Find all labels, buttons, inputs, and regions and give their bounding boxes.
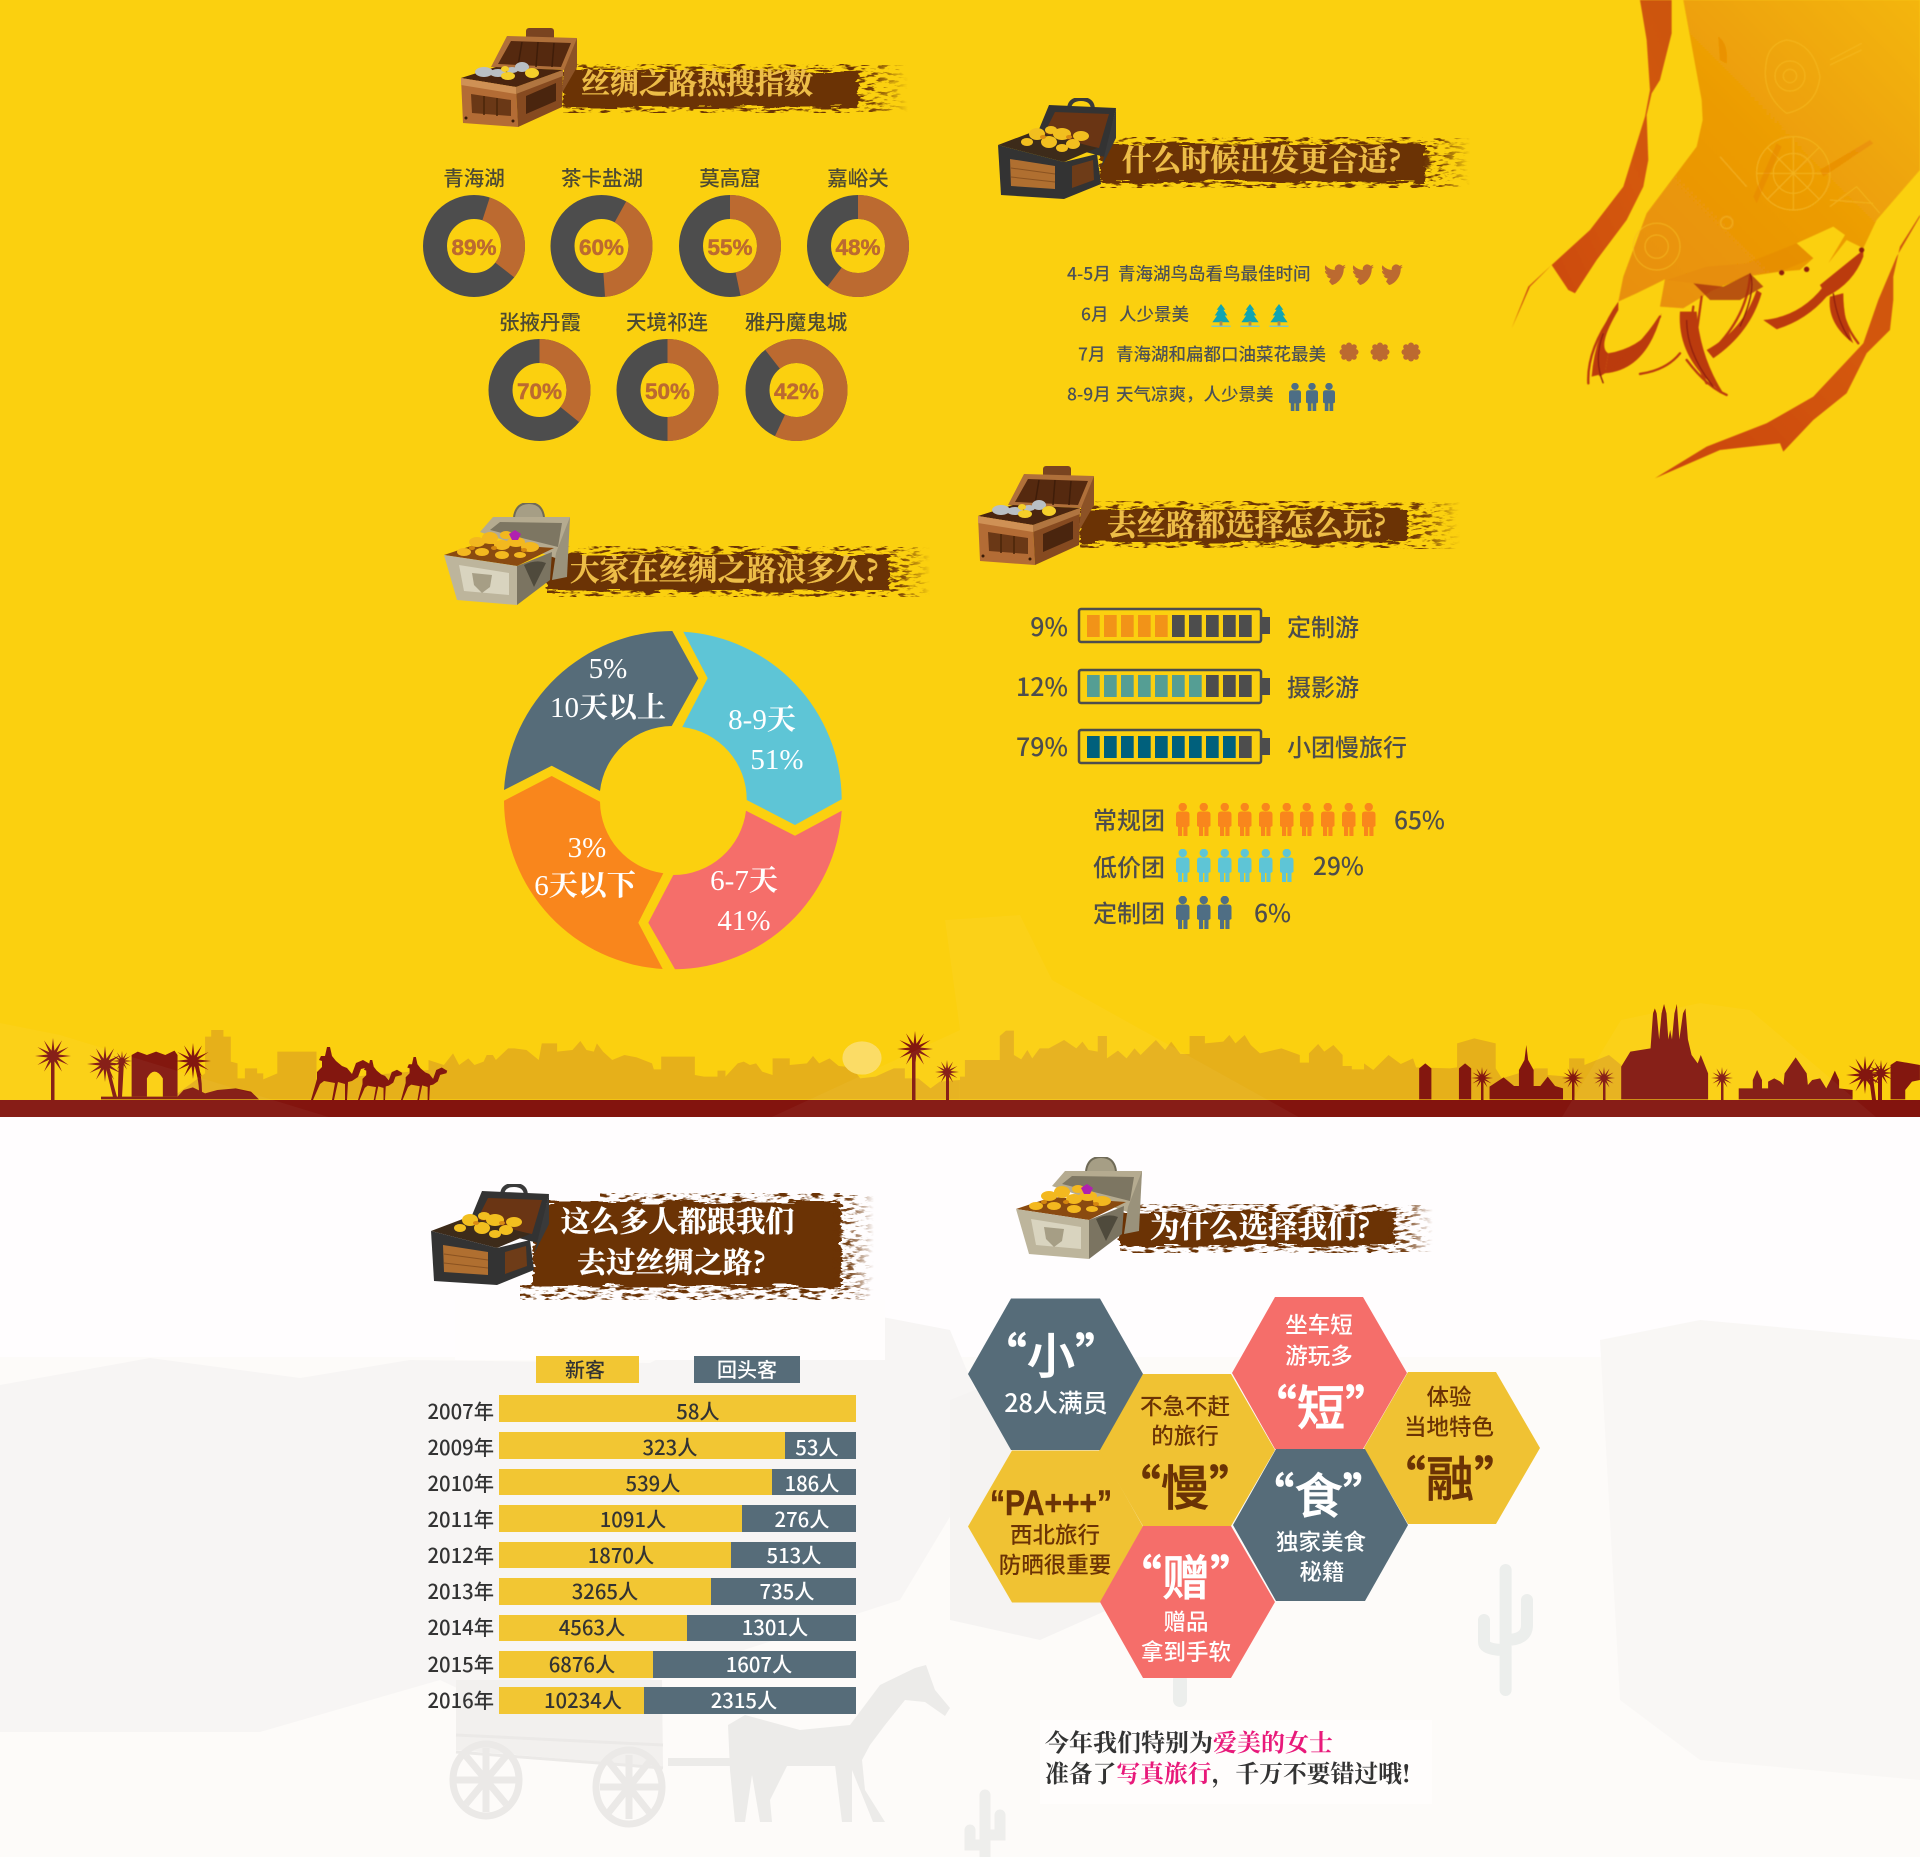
hexagon: 食: 独家美食	[1276, 1525, 1366, 1557]
battery: 定制游 9%: 定制游	[1287, 608, 1359, 643]
stacked bar chart: 2011年	[427, 1503, 494, 1533]
hexagon: 食: “食”	[1246, 1457, 1391, 1527]
list row: June	[1081, 302, 1289, 327]
stacked bar chart: 539人	[626, 1467, 680, 1497]
closing note: 今年我们特别为爱美的女士	[1045, 1723, 1333, 1758]
hexagon: 小: “小”	[979, 1317, 1123, 1387]
heading: how people travel	[978, 466, 1460, 565]
heading: search index: 丝绸之路热搜指数	[581, 62, 813, 102]
battery: 摄影游 12%: 12%	[1016, 668, 1068, 704]
hexagon: PA+++: 防晒很重要	[999, 1548, 1111, 1580]
hexagon: 赠	[1100, 1526, 1275, 1678]
stacked bar chart: 513人	[767, 1539, 821, 1569]
segment: 10天以上 5%: 5%	[589, 653, 627, 685]
list row: April to May: 青海湖鸟岛看鸟最佳时间	[1118, 261, 1310, 286]
yellow background	[0, 0, 1920, 1120]
stacked bar chart: 2013年	[427, 1575, 494, 1605]
hexagon: 融: “融”	[1378, 1440, 1522, 1510]
list row: August to September: 天气凉爽，人少景美	[1116, 382, 1274, 406]
hexagon: PA+++	[968, 1450, 1143, 1602]
stacked bar chart: 1607人	[726, 1648, 792, 1678]
battery: 定制游 9%: 9%	[1030, 608, 1068, 644]
list row: April to May	[1067, 261, 1403, 286]
segment: 6天以下 3%: 3%	[568, 832, 606, 864]
stacked bar chart: 2010年	[427, 1467, 494, 1497]
stacked bar chart: 2009年	[427, 1431, 494, 1461]
panel: customers per year	[427, 1185, 874, 1714]
list row: April to May: 4-5月	[1067, 261, 1111, 286]
donut: 张掖丹霞 70%	[499, 306, 581, 429]
cart and horse silhouette	[453, 1665, 950, 1824]
heading: how long: 大家在丝绸之路浪多久?	[570, 548, 879, 590]
donut: 茶卡盐湖 60%: 茶卡盐湖	[561, 162, 643, 192]
panel: how long people stay	[444, 503, 930, 969]
stacked bar chart: 323人	[643, 1431, 697, 1461]
stacked bar chart: 1301人	[742, 1611, 808, 1641]
heading: customers per year: 这么多人都跟我们	[561, 1198, 794, 1240]
list row: August to September	[1067, 382, 1335, 411]
heading: when to depart	[998, 99, 1470, 199]
overlay: pale mountains	[0, 915, 1903, 1140]
faint desert backdrop	[0, 1117, 1920, 1857]
stacked bar chart: 2007年	[427, 1395, 494, 1425]
segment: 6-7天 41%: 6-7天	[710, 858, 778, 899]
segment: 10天以上 5%	[504, 631, 698, 791]
heading: how people travel: 去丝路都选择怎么玩?	[1107, 502, 1386, 544]
donut: 青海湖 89%	[425, 162, 523, 295]
list row: June: 人少景美	[1119, 302, 1189, 326]
donut: 嘉峪关 48%: 48%	[835, 235, 881, 260]
stacked bar chart: 2015年	[427, 1648, 494, 1678]
heading: customers per year: 去过丝绸之路?	[577, 1240, 766, 1282]
list row: August to September: 8-9月	[1067, 382, 1111, 406]
stacked bar chart: 53人	[795, 1431, 839, 1461]
legend	[536, 1354, 800, 1383]
hexagon: 赠: 赠品	[1163, 1605, 1209, 1637]
battery: 摄影游 12%: 摄影游	[1287, 668, 1359, 703]
silk ribbon illustration	[1512, 0, 1920, 478]
panel: search index	[425, 28, 908, 445]
donut: 嘉峪关 48%: 嘉峪关	[827, 162, 889, 192]
stacked bar chart: 186人	[785, 1467, 839, 1497]
hexagon: PA+++: 西北旅行	[1010, 1518, 1100, 1550]
hexagon: 融: 当地特色	[1404, 1410, 1494, 1442]
legend: 回头客	[717, 1354, 777, 1383]
pictogram row: 定制团 6%	[1093, 894, 1291, 930]
donut: 嘉峪关 48%	[819, 162, 897, 285]
donut: 莫高窟 55%	[691, 162, 769, 285]
donut: 莫高窟 55%: 莫高窟	[699, 162, 761, 192]
skyline silhouette	[178, 1030, 1621, 1099]
donut: 青海湖 89%: 89%	[451, 235, 497, 260]
hexagon: 食	[1233, 1449, 1408, 1601]
segment: 8-9天 51%	[682, 632, 842, 825]
list row: July	[1078, 342, 1420, 366]
list row: July: 青海湖和扁都口油菜花最美	[1116, 342, 1326, 366]
list row: July: 7月	[1078, 342, 1105, 366]
pictogram row: 低价团 29%: 29%	[1313, 848, 1364, 883]
segment: 6天以下 3%	[504, 776, 663, 969]
closing note: 准备了写真旅行，千万不要错过哦!	[1045, 1755, 1410, 1789]
stacked bar chart: 10234人	[544, 1684, 622, 1714]
stacked bar chart: 1870人	[588, 1539, 654, 1569]
hexagon: 融: 体验	[1426, 1380, 1472, 1412]
hexagon: 赠: “赠”	[1114, 1539, 1258, 1609]
list row: June: 6月	[1081, 302, 1108, 326]
stacked bar chart: 2315人	[711, 1684, 777, 1714]
pictogram row: 低价团 29%	[1093, 848, 1364, 883]
pictogram row: 定制团 6%: 定制团	[1093, 894, 1165, 929]
foreground silhouettes: palms, arch, camels and cathedral	[35, 1004, 1920, 1100]
hexagon: 慢	[1099, 1374, 1275, 1526]
hexagon: 小	[968, 1298, 1143, 1450]
lower background	[0, 1117, 1920, 1857]
stacked bar chart: 4563人	[559, 1611, 625, 1641]
hexagon: 食: 秘籍	[1299, 1555, 1345, 1587]
battery: 小团慢旅行 79%: 小团慢旅行	[1287, 728, 1407, 763]
stacked bar chart: 6876人	[549, 1648, 615, 1678]
stacked bar chart: 2016年	[427, 1684, 494, 1714]
panel: why choose us	[968, 1157, 1540, 1804]
stacked bar chart: 58人	[676, 1395, 720, 1425]
heading: why choose us: 为什么选择我们?	[1150, 1204, 1370, 1246]
hexagon: 小: 28人满员	[1004, 1384, 1108, 1420]
stacked bar chart: 276人	[775, 1503, 829, 1533]
heading: when to depart: 什么时候出发更合适?	[1122, 138, 1401, 180]
hexagon: 慢: “慢”	[1113, 1449, 1257, 1519]
sun	[842, 1041, 882, 1075]
segment: 6-7天 41%	[648, 811, 842, 969]
battery: 定制游 9%	[1030, 608, 1359, 644]
pictogram row: 定制团 6%: 6%	[1254, 895, 1291, 930]
pictogram row: 常规团 65%: 常规团	[1093, 801, 1165, 836]
stacked bar chart: 2012年	[427, 1539, 494, 1569]
red ground band	[0, 1100, 1920, 1117]
stacked bar chart: 3265人	[572, 1575, 638, 1605]
donut: 茶卡盐湖 60%	[548, 162, 655, 299]
segment: 8-9天 51%: 8-9天	[728, 697, 796, 738]
stacked bar chart: 2014年	[427, 1611, 494, 1641]
hexagon: 短: 游玩多	[1285, 1339, 1353, 1371]
donut: 张掖丹霞 70%: 70%	[517, 379, 562, 404]
heading: customers per year	[431, 1185, 874, 1300]
segment: 6天以下 3%: 6天以下	[534, 863, 637, 904]
hexagon: 赠: 拿到手软	[1141, 1635, 1231, 1667]
pictogram row: 常规团 65%: 65%	[1394, 802, 1445, 837]
heading: how long	[444, 503, 930, 605]
donut: 雅丹魔鬼城 42%: 42%	[774, 379, 819, 404]
battery: 摄影游 12%	[1016, 668, 1359, 704]
closing note	[1040, 1720, 1432, 1804]
hexagon: 慢: 的旅行	[1151, 1419, 1219, 1451]
stacked bar chart	[427, 1395, 856, 1714]
donut: 莫高窟 55%: 55%	[707, 235, 753, 260]
hexagon: 融	[1364, 1372, 1540, 1524]
hexagon: PA+++: “PA+++”	[990, 1484, 1112, 1523]
segment: 10天以上 5%: 10天以上	[550, 685, 666, 726]
panel: how people travel	[978, 466, 1460, 930]
donut: 天境祁连 50%: 50%	[645, 379, 690, 404]
donut: 雅丹魔鬼城 42%: 雅丹魔鬼城	[745, 306, 847, 336]
donut: 茶卡盐湖 60%: 60%	[579, 235, 624, 260]
segment: 8-9天 51%: 51%	[750, 744, 804, 776]
donut: 雅丹魔鬼城 42%	[742, 306, 851, 445]
heading: search index	[461, 28, 908, 127]
donut: 天境祁连 50%: 天境祁连	[626, 306, 708, 336]
stacked bar chart: 735人	[760, 1575, 814, 1605]
segment: 6-7天 41%: 41%	[717, 905, 771, 937]
donut: 张掖丹霞 70%: 张掖丹霞	[499, 306, 581, 336]
pictogram row: 常规团 65%	[1093, 801, 1445, 837]
panel: when to depart	[998, 99, 1470, 411]
legend: 新客	[565, 1354, 605, 1383]
battery: 小团慢旅行 79%: 79%	[1016, 728, 1068, 764]
donut: 青海湖 89%: 青海湖	[443, 162, 505, 192]
stacked bar chart: 1091人	[600, 1503, 666, 1533]
hexagon: 短	[1232, 1297, 1407, 1449]
heading: why choose us	[1016, 1157, 1433, 1259]
hexagon: 短: “短”	[1249, 1369, 1393, 1439]
pictogram row: 低价团 29%: 低价团	[1093, 848, 1165, 883]
donut: 天境祁连 50%	[626, 306, 708, 429]
hexagon: 慢: 不急不赶	[1140, 1390, 1230, 1422]
battery: 小团慢旅行 79%	[1016, 728, 1407, 764]
hexagon: 短: 坐车短	[1285, 1308, 1353, 1340]
